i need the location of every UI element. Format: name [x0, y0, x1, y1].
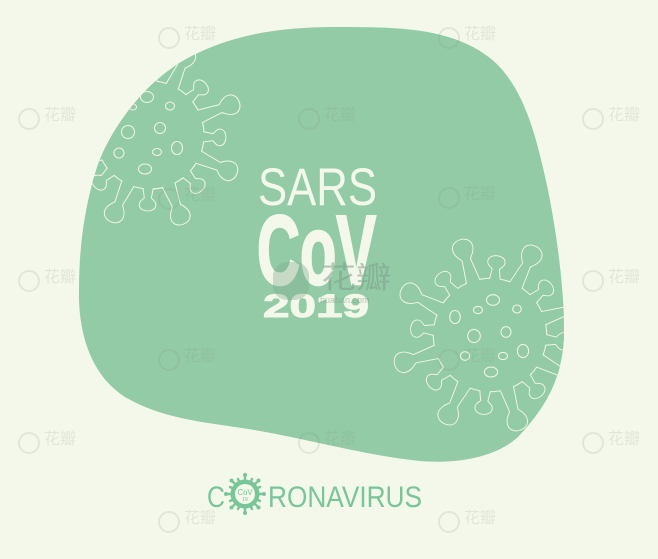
- watermarks: repeated logo grid: 花瓣: [464, 185, 496, 203]
- title: CoV: CoV: [257, 195, 376, 305]
- watermarks: repeated logo grid: 花瓣: [184, 509, 216, 527]
- icon: small virus logo: 19: [242, 497, 248, 503]
- label: coronavirus wordmark: RONAVIRUS: [268, 481, 422, 514]
- icon: small virus logo: [224, 473, 266, 515]
- watermarks: repeated logo grid: 花瓣: [464, 347, 496, 365]
- watermarks: repeated logo grid: 花瓣: [184, 25, 216, 43]
- watermarks: repeated logo grid: 花瓣: [608, 106, 640, 124]
- title: 2019: 2019: [263, 288, 369, 324]
- watermarks: repeated logo grid: 花瓣: [44, 268, 76, 286]
- watermarks: repeated logo grid: 花瓣: [44, 430, 76, 448]
- label: coronavirus wordmark: C: [207, 481, 225, 514]
- watermarks: repeated logo grid: 花瓣: [324, 430, 356, 448]
- watermarks: repeated logo grid: 花瓣: [184, 186, 216, 204]
- watermarks: repeated logo grid: 花瓣: [324, 106, 356, 124]
- icon: virus outline bottom right: [394, 238, 564, 432]
- watermarks: repeated logo grid: 花瓣: [608, 268, 640, 286]
- watermarks: repeated logo grid: 花瓣: [464, 25, 496, 43]
- watermarks: repeated logo grid: 花瓣: [184, 347, 216, 365]
- icon: small virus logo: CoV: [238, 487, 253, 497]
- watermarks: repeated logo grid: 花瓣: [464, 509, 496, 527]
- watermark: centre: huaban.com: [320, 295, 370, 305]
- icon: virus outline top left: [92, 54, 240, 226]
- watermark: centre: [273, 262, 391, 305]
- title: SARS: SARS: [258, 158, 377, 217]
- watermark: centre: 花瓣: [321, 262, 391, 295]
- green blob panel: [79, 27, 564, 462]
- label: coronavirus wordmark: [207, 473, 422, 515]
- watermarks: repeated logo grid: 花瓣: [44, 106, 76, 124]
- watermarks: repeated logo grid: 花瓣: [608, 430, 640, 448]
